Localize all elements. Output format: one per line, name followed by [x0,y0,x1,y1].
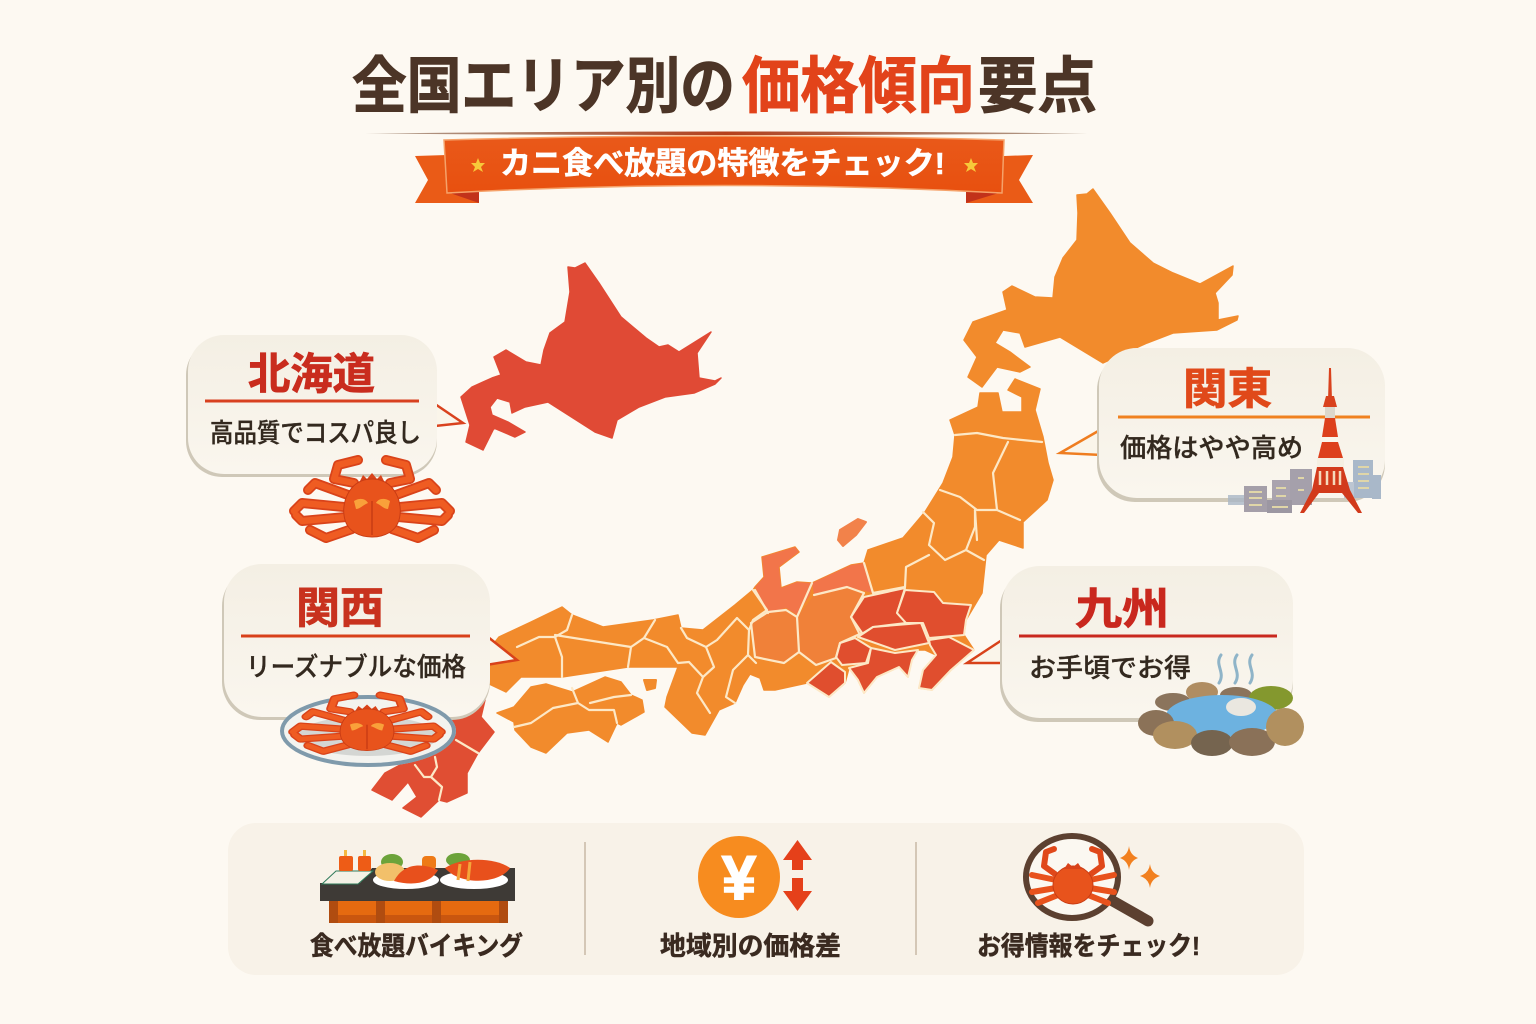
description: リーズナブルな価格 [246,652,466,682]
banner star right [964,158,978,172]
icon: Tokyo Tower [1300,368,1362,513]
icon: snow crab [294,460,450,538]
heading: 九州 [1075,586,1169,634]
callout: Kanto [1060,348,1385,502]
icon: buffet table [320,850,515,923]
heading: 関東 [1183,366,1272,414]
Chubu zone [751,587,864,665]
Hokkaido (orange) [964,189,1238,387]
callout: Hokkaido [186,335,463,477]
tail [1060,430,1102,455]
description: 高品質でコスパ良し [210,418,421,448]
Kanto zone [807,588,974,697]
Sado [838,519,866,546]
tail [967,640,1004,663]
title [352,52,1097,120]
title: 価格傾向 [742,52,975,120]
banner text: カニ食べ放題の特徴をチェック! [500,146,945,181]
caption: regional price difference: 地域別の価格差 [660,931,841,961]
title: 要点 [978,52,1097,120]
panel: bottom summary [228,823,1304,975]
callout: Kyushu [967,566,1293,722]
steam [1219,655,1252,683]
description: 価格はやや高め [1120,433,1303,463]
prefecture borders [415,433,1042,800]
callout: Kansai [222,564,517,720]
title underline [365,132,1088,135]
caption: buffet: 食べ放題バイキング [310,931,523,961]
icon: crab on plate [280,695,456,767]
caption: deal info: お得情報をチェック! [977,931,1200,961]
tail [435,404,463,426]
ribbon banner [415,136,1033,203]
tail [486,637,517,665]
banner star left [471,158,485,172]
icon: magnifier with crab [1026,836,1160,921]
Honshu [487,379,1053,735]
icon: city buildings [1228,460,1381,513]
Shikoku [497,677,644,753]
icon: yen coin with arrows: ¥ [722,844,757,913]
magnifier crab [1032,849,1114,904]
icon: hot spring [1138,655,1304,756]
description: お手頃でお得 [1029,653,1191,683]
Awaji [644,680,656,690]
Kyushu [372,700,494,817]
Hokuriku zone [755,547,873,615]
map: Hokkaido highlighted [461,263,721,450]
map: Japan [372,189,1238,817]
icon: yen coin with arrows [698,836,812,918]
title: 全国エリア別の [352,52,735,120]
heading: 関西 [296,585,384,633]
heading: 北海道 [248,351,375,399]
